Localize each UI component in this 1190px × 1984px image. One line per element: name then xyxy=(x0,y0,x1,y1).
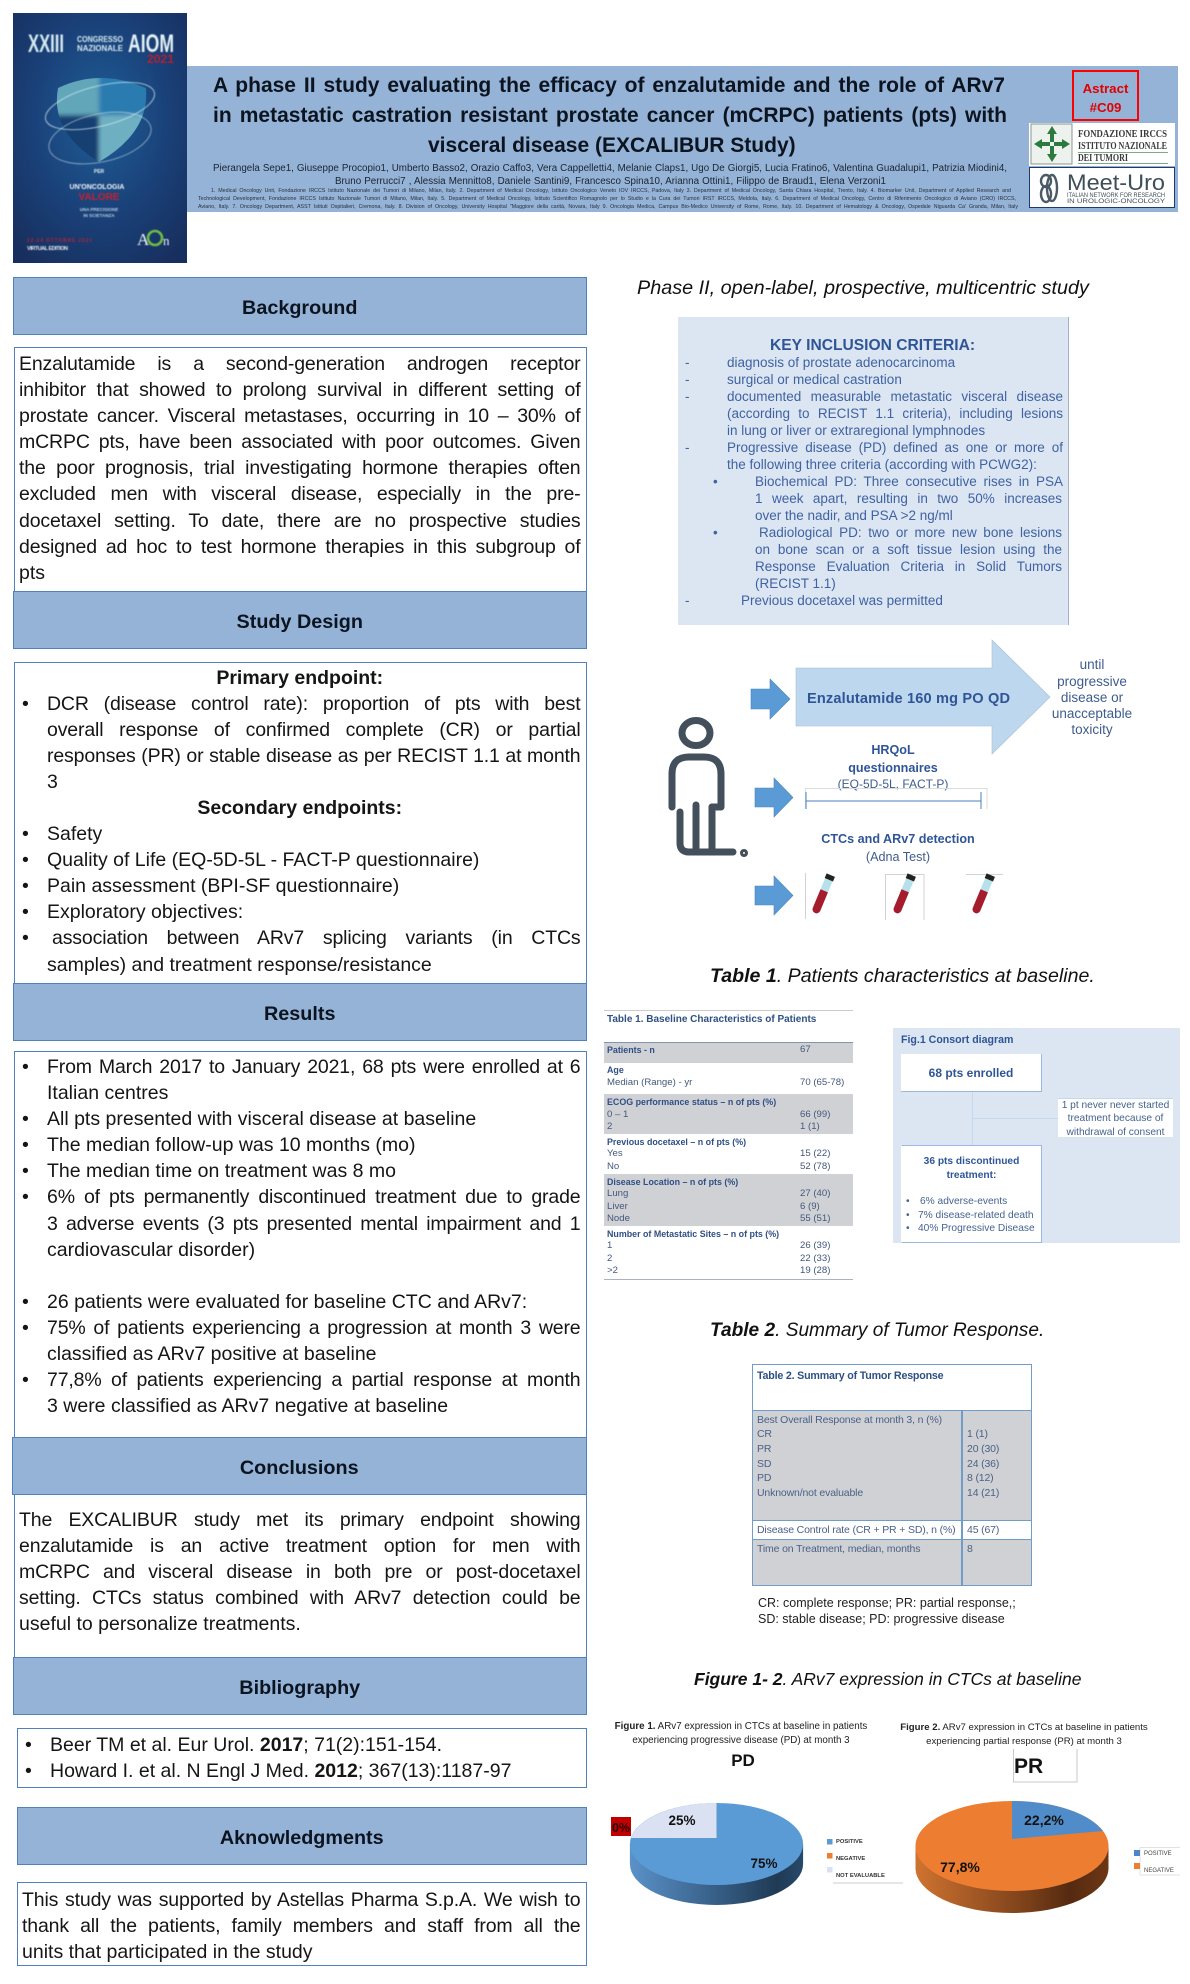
panel: acknowledgments text xyxy=(17,1882,586,1966)
table 2 legend: SD: stable disease; PD: progressive disease xyxy=(758,1612,1005,1626)
label: treatment duration xyxy=(1052,657,1132,737)
panel: study design text: Secondary endpoints: xyxy=(197,797,402,819)
table rows: 0 – 1 xyxy=(607,1109,628,1120)
icon: patient figure xyxy=(672,720,746,854)
table rows: Age xyxy=(607,1065,624,1075)
poster cover image: AIOM 2021 congress: VALORE xyxy=(79,192,120,203)
table rows: Disease Location – n of pts (%) xyxy=(607,1177,738,1187)
label: 77,8%: 77,8% xyxy=(940,1859,980,1875)
poster title: A phase II study evaluating the efficacy of enzalutamide and the role of ARv7 xyxy=(213,74,1005,97)
caption: Figures 1-2: Figure 1- 2. ARv7 expression in CTCs at baseline xyxy=(694,1669,1081,1689)
panel: results text: • xyxy=(22,1056,29,1078)
criteria list: Radiological PD: two or more new bone lesions xyxy=(759,525,1062,540)
panel: results text: 6% of pts permanently discontinued treatment due to grade xyxy=(47,1186,580,1208)
criteria list: the following three criteria (according with PCWG2): xyxy=(727,457,1037,472)
timeline: questionnaires xyxy=(806,788,987,809)
legend: NOT EVALUABLE xyxy=(836,1873,885,1879)
label: HRQoL questionnaires: HRQoL xyxy=(871,743,915,757)
table rows: CR xyxy=(757,1428,772,1440)
panel: background text: prostate cancer. Visceral metastases, occurring in 10 – 30% of xyxy=(19,405,580,427)
table rows: Disease Control rate (CR + PR + SD), n (%) xyxy=(757,1524,956,1536)
heading: Background: Background xyxy=(242,297,357,319)
panel: results text: From March 2017 to January 2021, 68 pts were enrolled at 6 xyxy=(47,1056,580,1078)
arrow: to questionnaires xyxy=(755,778,793,817)
table rows: 2 xyxy=(607,1121,612,1132)
criteria list: 1 week apart, resulting in two 50% increases xyxy=(755,491,1062,506)
criteria list xyxy=(685,355,1064,608)
legend xyxy=(1134,1848,1180,1875)
table rows: Time on Treatment, median, months xyxy=(757,1543,920,1555)
legend: POSITIVE xyxy=(836,1839,863,1845)
criteria list: on bone scan or a soft tissue lesion using the xyxy=(755,542,1062,557)
label: 75%: 75% xyxy=(750,1856,778,1871)
label: 0%: 0% xyxy=(612,1820,630,1835)
table rows: Node xyxy=(607,1213,630,1224)
legend: NEGATIVE xyxy=(836,1856,865,1862)
poster cover image: AIOM 2021 congress: XXIII xyxy=(28,30,64,58)
panel: results text: 3 adverse events (3 pts presented mental impairment and 1 xyxy=(47,1213,580,1235)
poster cover image: AIOM 2021 congress: CONGRESSO xyxy=(77,35,123,44)
poster cover image: AIOM 2021 congress: UNA PRECISIONE xyxy=(80,207,118,212)
criteria list: • xyxy=(713,474,718,489)
figure 1 title xyxy=(615,1721,867,1746)
table rows: Lung xyxy=(607,1188,628,1199)
authors xyxy=(213,163,1007,187)
affiliations: Aviano, Italy. 7. Oncology Department, ASST Istituti Ospitalieri, Cremona, Italy. 8. Division of Oncology, University Hospital "Maggiore della carità, Novara, Italy 9. Oncologia Medica, Campus Bio-Medico University of Rome, Rome, Italy. 10. Department of Hematology & Oncology, Ospedale Niguarda Ca' Granda, Milan, Italy xyxy=(198,204,1018,210)
panel: results text: • xyxy=(22,1291,29,1313)
panel: background text: inhibitor that showed to prolong survival in different setting of xyxy=(19,379,580,401)
heading: Study Design xyxy=(13,591,586,649)
criteria list: (according to RECIST 1.1 criteria), including lesions xyxy=(727,406,1063,421)
arrow: to treatment xyxy=(751,679,790,719)
poster cover image: AIOM 2021 congress: UN'ONCOLOGIA xyxy=(70,184,124,191)
panel: conclusions text: useful to personalize treatments. xyxy=(19,1613,301,1635)
panel: background text: the poor prognosis, trial investigating hormone therapies often xyxy=(19,457,580,479)
label: Enzalutamide dose: Enzalutamide 160 mg PO QD xyxy=(807,691,1010,707)
icon: blood tube 2 xyxy=(892,873,916,915)
label: treatment duration: disease or xyxy=(1061,690,1124,705)
table rows: PR xyxy=(757,1443,771,1455)
panel: study design text: • xyxy=(22,849,29,871)
logo: Meet-Uro: Meet-Uro xyxy=(1067,170,1165,195)
table rows: 1 (1) xyxy=(967,1428,988,1440)
pie xyxy=(630,1803,803,1905)
poster cover image: AIOM 2021 congress: VIRTUAL EDITION xyxy=(27,246,68,252)
box: discontinued treatment: 40% Progressive Disease xyxy=(918,1223,1035,1234)
table rows: 1 xyxy=(607,1240,612,1251)
panel: study design text: DCR (disease control rate): proportion of pts with best xyxy=(47,693,580,715)
panel: background text: mCRPC pts, have been associated with poor outcomes. Given xyxy=(19,431,580,453)
icon: blood tube 3 xyxy=(971,873,995,915)
table rows xyxy=(607,1044,844,1276)
table rows: 55 (51) xyxy=(800,1213,830,1224)
table rows: SD xyxy=(757,1458,771,1470)
panel: results text: 75% of patients experiencing a progression at month 3 were xyxy=(47,1317,580,1339)
table rows: Yes xyxy=(607,1148,623,1159)
label: 22,2%: 22,2% xyxy=(1024,1812,1064,1828)
label: HRQoL questionnaires: questionnaires xyxy=(848,761,938,775)
table rows: ECOG performance status – n of pts (%) xyxy=(607,1097,776,1107)
heading: key inclusion criteria: KEY INCLUSION CRITERIA: xyxy=(770,337,975,354)
panel: conclusions text xyxy=(14,1480,586,1658)
criteria list: diagnosis of prostate adenocarcinoma xyxy=(727,355,955,370)
table rows: 26 (39) xyxy=(800,1240,830,1251)
box: never started treatment: treatment because of xyxy=(1068,1113,1163,1124)
panel: results text: • xyxy=(22,1108,29,1130)
panel: conclusions text: setting. CTCs status combined with ARv7 detection could be xyxy=(19,1587,580,1609)
panel: study design text: overall response of confirmed complete (CR) or partial xyxy=(47,719,580,741)
abstract number badge: Astract xyxy=(1083,81,1128,96)
box: never started treatment: withdrawal of consent xyxy=(1067,1127,1164,1138)
poster cover image: AIOM 2021 congress xyxy=(13,13,187,263)
figure 1 title: Figure 1. ARv7 expression in CTCs at baseline in patients xyxy=(615,1721,867,1732)
table rows: 15 (22) xyxy=(800,1148,830,1159)
criteria list: over the nadir, and PSA >2 ng/ml xyxy=(755,508,953,523)
table rows xyxy=(757,1414,999,1555)
table rows: 70 (65-78) xyxy=(800,1077,844,1088)
poster cover image: AIOM 2021 congress: IN SCIETANZA xyxy=(83,213,115,218)
caption: Table 2: Table 2. Summary of Tumor Response. xyxy=(710,1320,1044,1341)
panel: results text xyxy=(14,1051,586,1438)
heading: consort diagram: Fig.1 Consort diagram xyxy=(901,1034,1013,1046)
criteria list: - xyxy=(685,440,690,455)
box: enrolled: 68 pts enrolled xyxy=(929,1066,1013,1080)
criteria list: - xyxy=(685,389,690,404)
heading: Aknowledgments xyxy=(17,1807,586,1865)
box: never started treatment: 1 pt never never started xyxy=(1062,1100,1169,1111)
heading: Bibliography: Bibliography xyxy=(239,1677,360,1699)
table rows: 14 (21) xyxy=(967,1487,999,1499)
panel: background text: pts xyxy=(19,562,45,584)
label: PR xyxy=(1014,1749,1077,1782)
poster title: visceral disease (EXCALIBUR Study) xyxy=(428,134,796,157)
abstract number badge xyxy=(1072,70,1139,121)
criteria list: Response Evaluation Criteria in Solid Tumors xyxy=(755,559,1062,574)
heading: Bibliography xyxy=(13,1657,586,1715)
table rows: 2 xyxy=(607,1253,612,1264)
arrow: treatment xyxy=(796,640,1050,754)
panel: results text: 3 were classified as ARv7 negative at baseline xyxy=(47,1395,448,1417)
panel: study design text xyxy=(14,662,586,984)
legend: NEGATIVE xyxy=(1144,1868,1174,1874)
panel: study design text: association between ARv7 splicing variants (in CTCs xyxy=(52,927,580,949)
panel: study design text: • xyxy=(22,693,29,715)
panel: study design text: samples) and treatment response/resistance xyxy=(47,954,432,976)
box: discontinued treatment: treatment: xyxy=(947,1170,996,1180)
heading: Aknowledgments: Aknowledgments xyxy=(220,1827,384,1849)
panel: study design text: Safety xyxy=(47,823,102,845)
table rows: Unknown/not evaluable xyxy=(757,1487,863,1499)
logo: Meet-Uro: IN UROLOGIC-ONCOLOGY xyxy=(1067,199,1165,205)
panel: study design text: Pain assessment (BPI-SF questionnaire) xyxy=(47,875,399,897)
table rows: 22 (33) xyxy=(800,1253,830,1264)
label: treatment duration: progressive xyxy=(1057,674,1127,689)
panel: results text: • xyxy=(22,1317,29,1339)
panel: consort diagram xyxy=(893,1028,1180,1243)
panel: study design text: Quality of Life (EQ-5D-5L - FACT-P questionnaire) xyxy=(47,849,479,871)
panel: study design text: responses (PR) or stable disease as per RECIST 1.1 at month xyxy=(47,745,580,767)
table rows: Liver xyxy=(607,1201,628,1212)
panel: study design text: 3 xyxy=(47,771,58,793)
table rows: 67 xyxy=(800,1044,811,1055)
table 2 legend xyxy=(758,1596,1016,1626)
panel: study design text: • xyxy=(22,823,29,845)
panel: conclusions text: enzalutamide is an active treatment option for men with xyxy=(19,1535,580,1557)
label: CTCs and ARv7 detection: (Adna Test) xyxy=(866,850,930,864)
panel: background text: designed ad hoc to test hormone therapies in this subgroup of xyxy=(19,536,580,558)
box: enrolled xyxy=(901,1054,1042,1092)
pie xyxy=(916,1801,1108,1913)
panel: results text: • xyxy=(22,1369,29,1391)
logo: Fondazione IRCCS Istituto Nazionale dei Tumori: DEI TUMORI xyxy=(1078,152,1128,164)
legend xyxy=(827,1839,903,1883)
logo: Meet-Uro: ITALIAN NETWORK FOR RESEARCH xyxy=(1067,193,1165,199)
icon: blood tube 1 xyxy=(811,873,835,915)
authors: Pierangela Sepe1, Giuseppe Procopio1, Umberto Basso2, Orazio Caffo3, Vera Cappelletti4, Melanie Claps1, Ugo De Giorgi5, Lucia Fratino6, Valentina Guadalupi1, Patrizia Miodini4, xyxy=(213,163,1007,174)
chart: figure 1 pie, progressive disease xyxy=(611,1721,903,1905)
table rows: Best Overall Response at month 3, n (%) xyxy=(757,1414,942,1426)
table rows: Number of Metastatic Sites – n of pts (%) xyxy=(607,1229,779,1239)
logo: Meet-Uro xyxy=(1029,167,1175,208)
label: treatment duration: until xyxy=(1080,657,1104,672)
box: discontinued treatment: • xyxy=(906,1210,910,1221)
criteria list: - xyxy=(685,593,690,608)
table rows: 27 (40) xyxy=(800,1188,830,1199)
panel: study design text: Exploratory objectives: xyxy=(47,901,243,923)
table: tumor response xyxy=(752,1364,1032,1586)
panel: bibliography list: Howard I. et al. N Engl J Med. 2012; 367(13):1187-97 xyxy=(50,1760,511,1782)
label: 25%: 25% xyxy=(668,1813,696,1828)
label: treatment duration: toxicity xyxy=(1071,722,1113,737)
poster cover image: AIOM 2021 congress: A xyxy=(137,230,150,249)
table rows: 66 (99) xyxy=(800,1109,830,1120)
affiliations: 1. Medical Oncology Unit, Fondazione IRCCS Istituto Nazionale dei Tumori di Milano, Milan, Italy. 2. Department of Medical Oncology, Istituto Oncologico Veneto IOV IRCCS, Padova, Italy 3. Department of Medical Oncology, Santa Chiara Hospital, Trento, Italy. 4. Biomarker Unit, Department of Applied Research and xyxy=(211,188,1011,194)
table title: Table 1. Baseline Characteristics of Patients xyxy=(607,1014,816,1025)
panel: background text: docetaxel setting. To date, there are no prospective studies xyxy=(19,510,580,532)
table rows: 6 (9) xyxy=(800,1201,820,1212)
panel: study design text: • xyxy=(22,875,29,897)
table 2 legend: CR: complete response; PR: partial response,; xyxy=(758,1596,1016,1610)
figure 2 title: Figure 2. ARv7 expression in CTCs at baseline in patients xyxy=(900,1722,1148,1733)
criteria list: Biochemical PD: Three consecutive rises in PSA xyxy=(755,474,1063,489)
arrow: to blood samples xyxy=(755,876,793,915)
criteria list: in lung or liver or extraregional lymphnodes xyxy=(727,423,985,438)
table rows: No xyxy=(607,1161,619,1172)
table rows: 8 xyxy=(967,1543,973,1555)
label: PR: PR xyxy=(1014,1755,1043,1778)
box: never started treatment xyxy=(1058,1098,1173,1137)
box: discontinued treatment: 7% disease-related death xyxy=(918,1210,1034,1221)
table rows: 24 (36) xyxy=(967,1458,999,1470)
box: discontinued treatment: • xyxy=(906,1196,910,1207)
poster cover image: AIOM 2021 congress: NAZIONALE xyxy=(77,44,124,53)
table rows: 20 (30) xyxy=(967,1443,999,1455)
poster cover image: AIOM 2021 congress: n xyxy=(163,233,170,248)
heading: Background xyxy=(13,277,586,335)
chart: figure 2 pie, partial response xyxy=(900,1722,1180,1913)
table rows: Previous docetaxel – n of pts (%) xyxy=(607,1137,746,1147)
panel: bibliography list xyxy=(17,1728,586,1788)
panel: results text: The median time on treatment was 8 mo xyxy=(47,1160,396,1182)
criteria list: Progressive disease (PD) defined as one or more of xyxy=(727,440,1063,455)
poster title: in metastatic castration resistant prostate cancer (mCRPC) patients (pts) with xyxy=(213,104,1007,127)
panel: results text: The median follow-up was 10 months (mo) xyxy=(47,1134,416,1156)
heading: Results xyxy=(13,983,586,1041)
legend: POSITIVE xyxy=(1144,1851,1172,1857)
heading: Results: Results xyxy=(264,1003,335,1025)
table rows: >2 xyxy=(607,1265,618,1276)
panel: results text: classified as ARv7 positive at baseline xyxy=(47,1343,377,1365)
caption: Table 1: Table 1. Patients characteristics at baseline. xyxy=(710,965,1095,987)
panel: results text: 77,8% of patients experiencing a partial response at month xyxy=(47,1369,580,1391)
box: discontinued treatment: 36 pts discontinued xyxy=(924,1156,1019,1167)
table rows: 1 (1) xyxy=(800,1121,820,1132)
panel: study design text: • xyxy=(22,901,29,923)
affiliations xyxy=(198,188,1018,210)
criteria list: - xyxy=(685,372,690,387)
logo: Fondazione IRCCS Istituto Nazionale dei Tumori xyxy=(1029,123,1175,166)
panel: bibliography list: • xyxy=(25,1734,32,1756)
poster cover image: AIOM 2021 congress: 2021 xyxy=(147,52,174,66)
label: PD: PD xyxy=(731,1751,755,1770)
criteria list: surgical or medical castration xyxy=(727,372,902,387)
abstract number badge: #C09 xyxy=(1090,100,1121,115)
criteria list: Previous docetaxel was permitted xyxy=(741,593,943,608)
table: baseline characteristics xyxy=(604,1010,853,1280)
title banner xyxy=(187,66,1178,212)
box: discontinued treatment: 6% adverse-events xyxy=(920,1196,1007,1207)
panel: results text: • xyxy=(22,1186,29,1208)
criteria list: (RECIST 1.1) xyxy=(755,576,836,591)
figure 2 title xyxy=(900,1722,1148,1747)
panel: background text: excluded men with visceral disease, especially in the pre- xyxy=(19,483,580,505)
panel: background text xyxy=(14,347,586,592)
box: discontinued treatment xyxy=(901,1145,1042,1243)
table rows: 19 (28) xyxy=(800,1265,830,1276)
heading: Conclusions: Conclusions xyxy=(240,1457,359,1479)
table title: Table 2. Summary of Tumor Response xyxy=(757,1370,943,1382)
panel: background text: Enzalutamide is a second-generation androgen receptor xyxy=(19,353,580,375)
poster title xyxy=(213,74,1007,157)
panel: conclusions text: mCRPC and visceral disease in both pre or post-docetaxel xyxy=(19,1561,580,1583)
panel: study design text: • xyxy=(22,927,29,949)
table rows: 45 (67) xyxy=(967,1524,999,1536)
panel: key inclusion criteria xyxy=(678,317,1069,625)
label: treatment duration: unacceptable xyxy=(1052,706,1132,721)
panel: results text: Italian centres xyxy=(47,1082,168,1104)
poster cover image: AIOM 2021 congress: PER xyxy=(94,169,105,175)
panel: results text: 26 patients were evaluated for baseline CTC and ARv7: xyxy=(47,1291,527,1313)
panel: acknowledgments text: units that participated in the study xyxy=(22,1941,313,1963)
panel: acknowledgments text: This study was supported by Astellas Pharma S.p.A. We wish to xyxy=(22,1888,580,1910)
label: CTCs and ARv7 detection xyxy=(821,832,975,864)
panel: study design text: Primary endpoint: xyxy=(216,666,383,688)
poster cover image: AIOM 2021 congress: 22-24 OTTOBRE 2021 xyxy=(27,238,92,244)
authors: Bruno Perrucci7 , Alessia Mennitto8, Daniele Santini9, Francesco Spina10, Arianna Ottini1, Filippo de Braud1, Elena Verzoni1 xyxy=(335,176,886,187)
panel: results text: • xyxy=(22,1160,29,1182)
panel: results text: cardiovascular disorder) xyxy=(47,1239,255,1261)
figure 2 title: experiencing partial response (PR) at month 3 xyxy=(926,1736,1122,1747)
panel: results text: All pts presented with visceral disease at baseline xyxy=(47,1108,476,1130)
criteria list: documented measurable metastatic visceral disease xyxy=(727,389,1063,404)
label: HRQoL questionnaires: (EQ-5D-5L, FACT-P) xyxy=(838,777,948,791)
study schema diagram xyxy=(668,639,1132,920)
box: discontinued treatment: • xyxy=(906,1223,910,1234)
heading: Study Design: Study Design xyxy=(237,611,363,633)
panel: acknowledgments text: thank all the patients, family members and staff from all the xyxy=(22,1915,580,1937)
panel: results text: • xyxy=(22,1134,29,1156)
panel: bibliography list: Beer TM et al. Eur Urol. 2017; 71(2):151-154. xyxy=(50,1734,442,1756)
table rows: PD xyxy=(757,1472,771,1484)
table rows: 8 (12) xyxy=(967,1472,994,1484)
panel: conclusions text: The EXCALIBUR study met its primary endpoint showing xyxy=(19,1509,580,1531)
figure 1 title: experiencing progressive disease (PD) at month 3 xyxy=(632,1735,850,1746)
label: HRQoL questionnaires xyxy=(838,743,948,791)
table rows: Median (Range) - yr xyxy=(607,1077,692,1088)
table rows: Patients - n xyxy=(607,1045,655,1055)
label: CTCs and ARv7 detection: CTCs and ARv7 detection xyxy=(821,832,975,846)
panel: bibliography list: • xyxy=(25,1760,32,1782)
affiliations: Technological Development, Fondazione IRCCS Istituto Nazionale Tumori di Milano, Milan, Italy. 5. Department of Medical Oncology, Istituto Scientifico Romagnolo per lo Studio e la Cura dei Tumori IRST IRCCS, Meldola, Italy. 6. Department of Medical Oncology, Centro di Riferimento Oncologico di Aviano (CRO) IRCCS, xyxy=(198,196,1016,202)
study type caption: Phase II, open-label, prospective, multicentric study xyxy=(637,277,1089,299)
criteria list: • xyxy=(713,525,718,540)
heading: Conclusions xyxy=(12,1437,586,1495)
table rows: 52 (78) xyxy=(800,1161,830,1172)
criteria list: - xyxy=(685,355,690,370)
